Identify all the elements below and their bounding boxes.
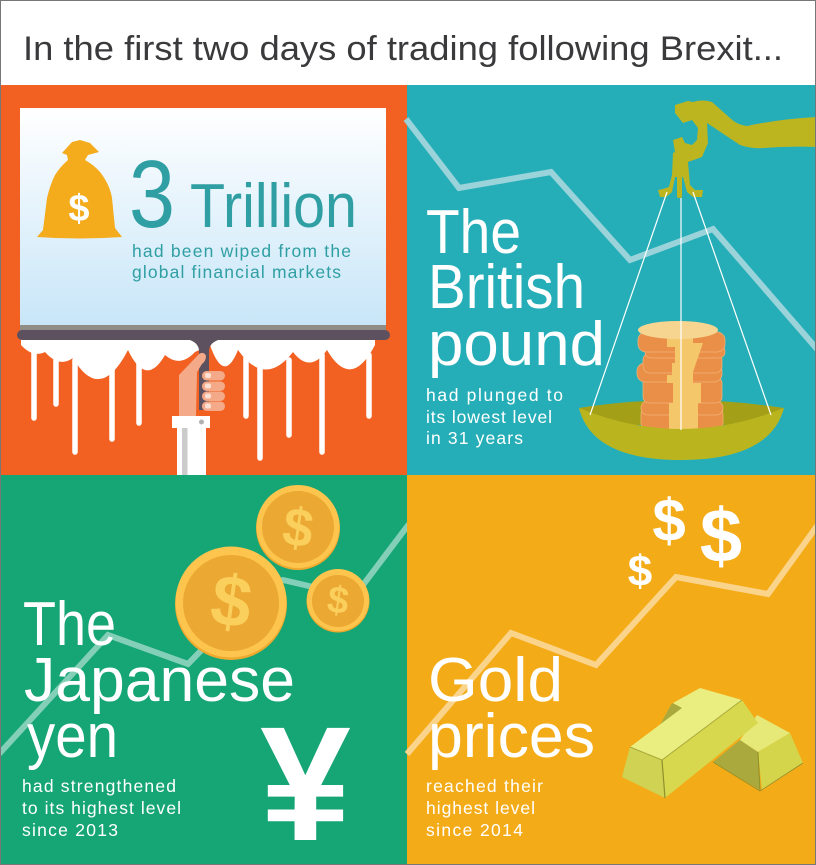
icon: hand holding scale — [658, 100, 816, 198]
icon: medium coin — [256, 485, 340, 570]
text: pound description: in 31 years — [426, 428, 523, 448]
text: yen description: to its highest level — [22, 798, 181, 818]
text: pound description — [426, 385, 563, 448]
line chart: rising gold — [407, 526, 816, 754]
heading: The British pound: pound — [428, 310, 605, 379]
heading: The British pound: The — [426, 198, 521, 267]
icon: medium coin: $ — [279, 496, 317, 560]
icon: money bag: $ — [68, 188, 90, 230]
icon: large coin — [175, 546, 287, 660]
icons: dollar signs: $ — [652, 487, 686, 554]
panel: 3 trillion wiped — [0, 85, 407, 475]
heading: The Japanese yen: yen — [27, 702, 118, 771]
text: gold description: since 2014 — [426, 820, 523, 840]
icon: money bag — [37, 140, 122, 238]
foam and drips — [21, 338, 375, 458]
text: gold description — [426, 776, 543, 840]
icon: hand holding squeegee — [172, 339, 225, 475]
text: gold description: reached their — [426, 776, 543, 796]
text: wiped description: had been wiped from the — [132, 241, 351, 261]
title banner — [0, 0, 816, 85]
heading: The British pound: British — [428, 253, 585, 322]
heading: Gold prices — [428, 646, 595, 771]
text: pound description: had plunged to — [426, 385, 563, 405]
heading: Gold prices: Gold — [428, 646, 563, 715]
icon: gold bars — [622, 688, 803, 798]
icons: dollar signs: $ — [700, 494, 742, 579]
big number: 3 trillion: 3 — [129, 141, 175, 248]
billboard — [20, 108, 386, 325]
icon: scale with coin stack — [579, 192, 784, 460]
heading: The Japanese yen — [23, 590, 295, 771]
icons: dollar signs: $ — [628, 547, 652, 596]
text: wiped description — [132, 241, 351, 282]
text: yen description — [22, 776, 181, 840]
heading: Gold prices: prices — [428, 702, 595, 771]
big number: 3 trillion — [129, 141, 357, 248]
heading: The British pound — [426, 198, 605, 379]
panel: Japanese yen — [0, 475, 409, 865]
icon: small coin — [306, 569, 370, 632]
heading: The Japanese yen: Japanese — [24, 646, 295, 715]
heading: The Japanese yen: The — [23, 590, 116, 659]
title: In the first two days of trading following Brexit... — [23, 30, 783, 68]
icon: large coin: $ — [206, 560, 257, 644]
text: pound description: its lowest level — [426, 407, 552, 427]
panel: gold prices — [407, 475, 816, 865]
text: wiped description: global financial markets — [132, 262, 341, 282]
icon: small coin: $ — [325, 579, 351, 623]
line chart: falling pound — [406, 119, 816, 349]
icons: dollar signs — [628, 487, 742, 596]
text: yen description: since 2013 — [22, 820, 118, 840]
line chart: rising yen — [0, 524, 409, 754]
text: gold description: highest level — [426, 798, 535, 818]
squeegee bar — [17, 325, 390, 340]
big number: 3 trillion: Trillion — [190, 172, 357, 241]
panel: British pound — [406, 85, 816, 475]
text: yen description: had strengthened — [22, 776, 176, 796]
